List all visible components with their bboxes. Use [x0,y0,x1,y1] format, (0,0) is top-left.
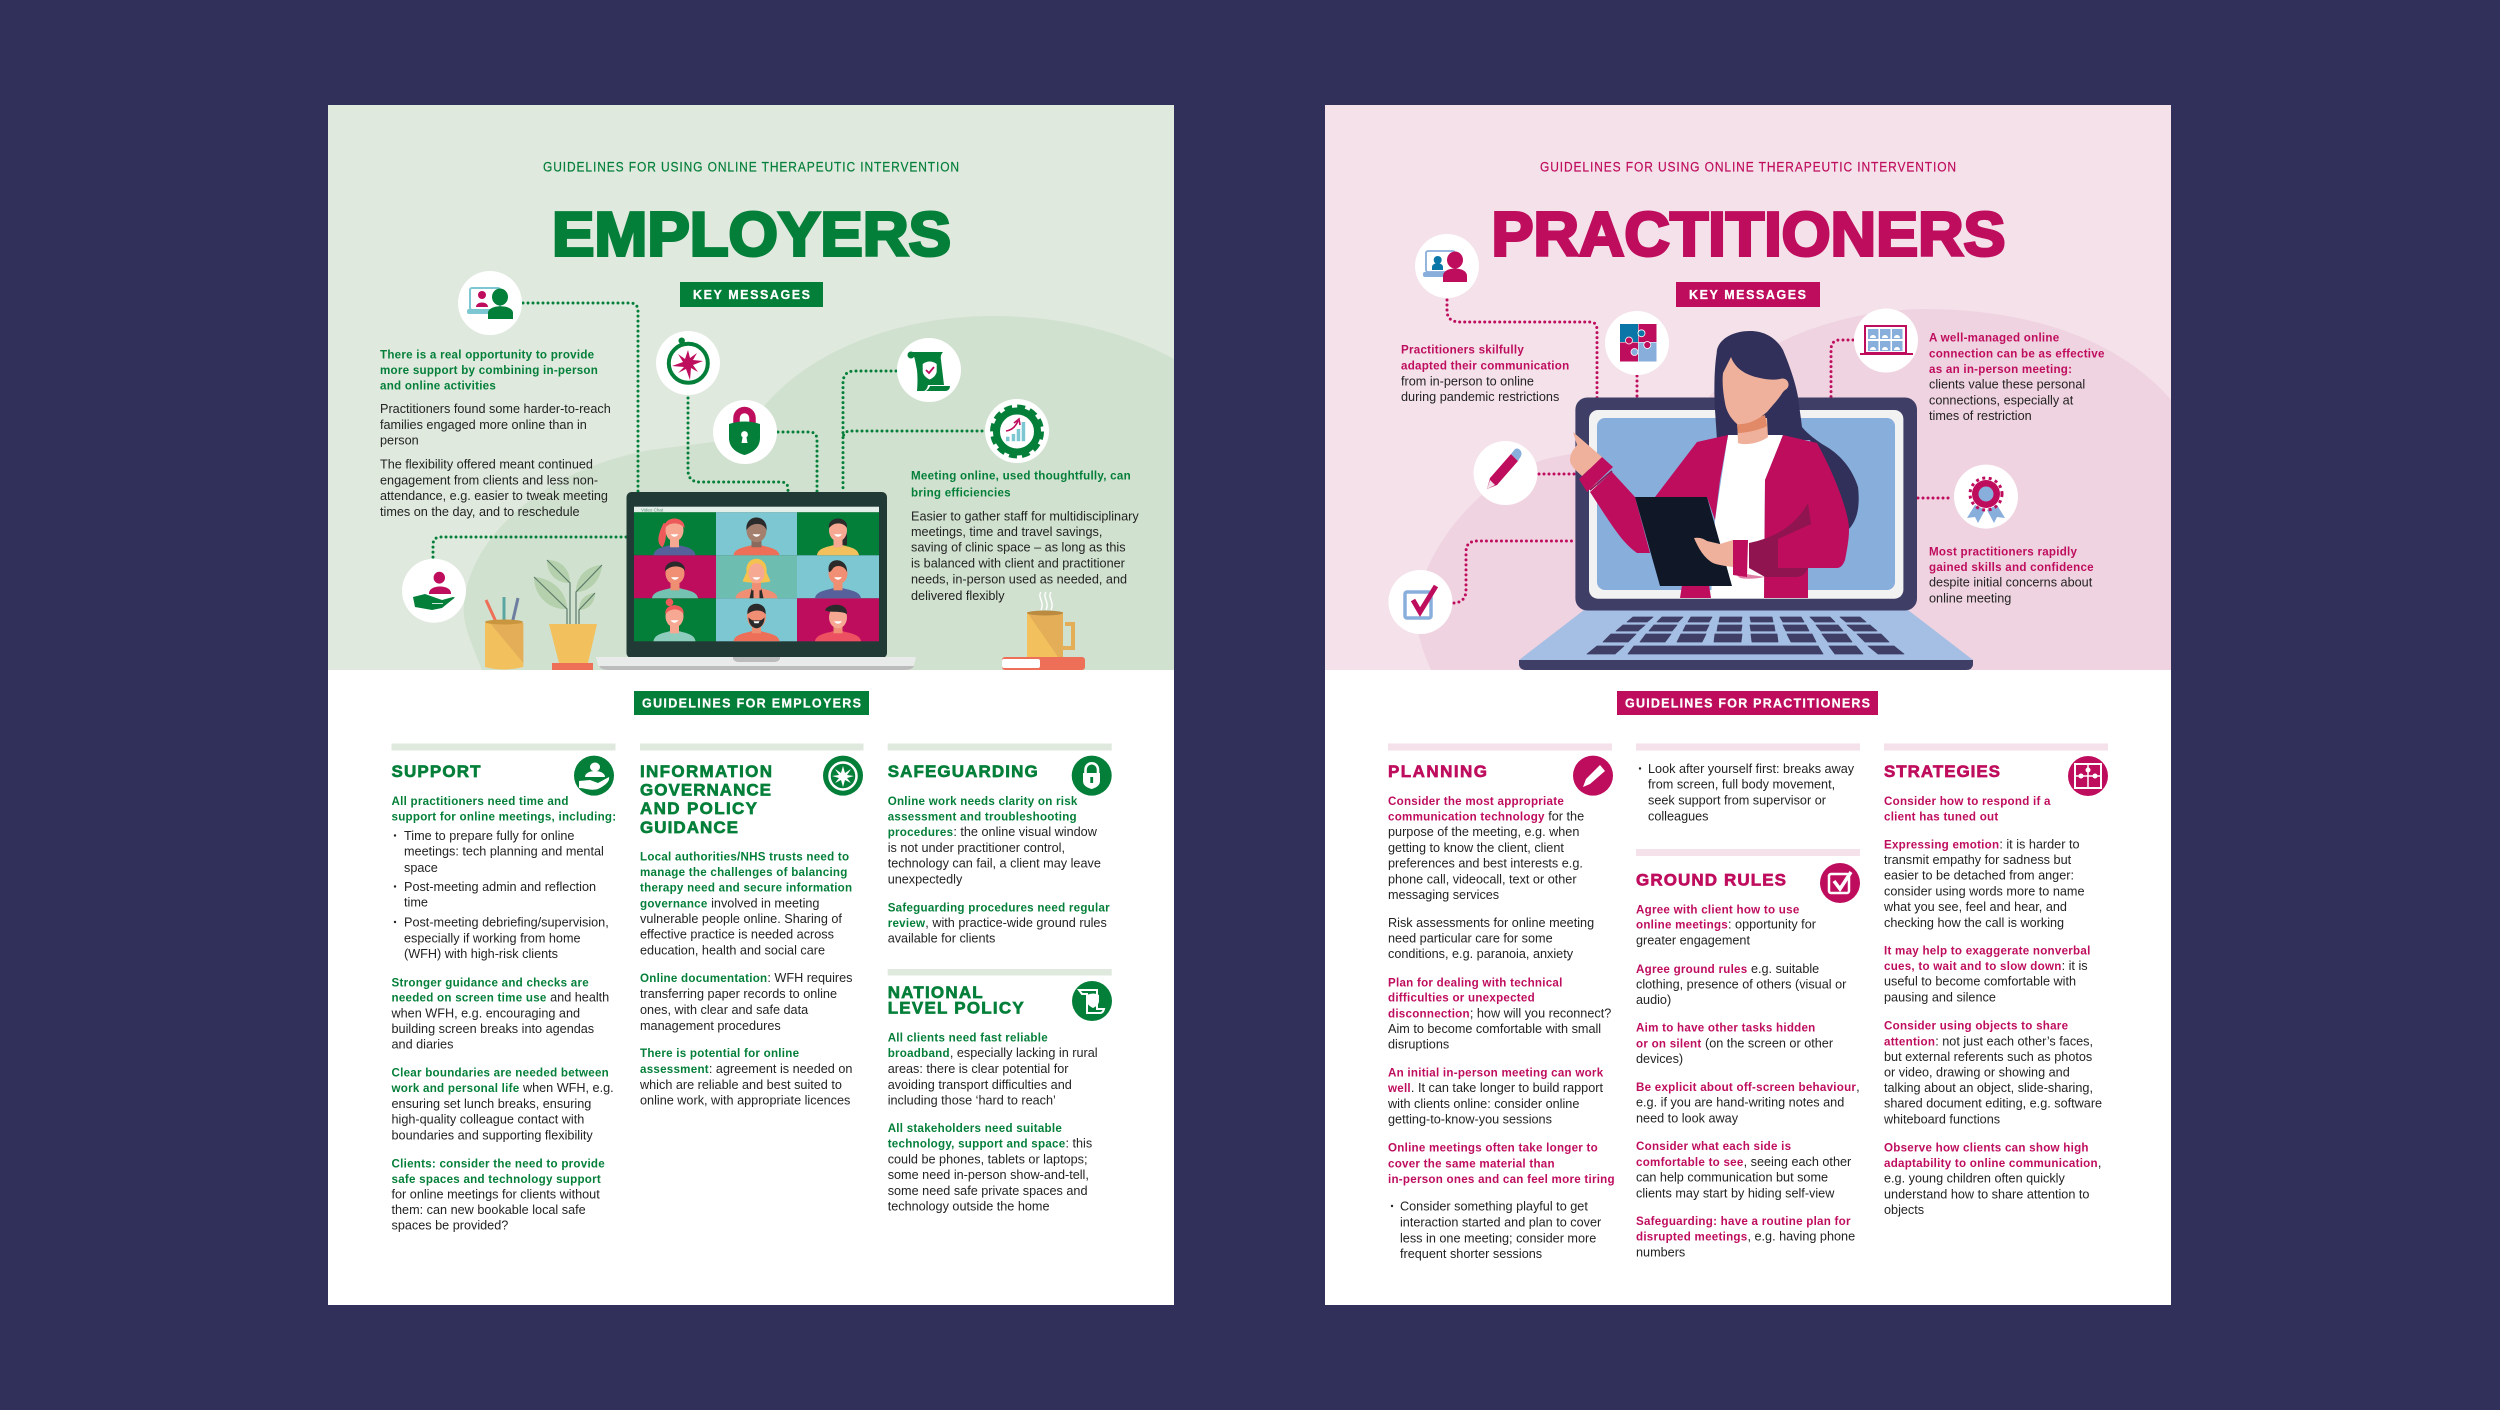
guidelines banner [1617,691,1878,715]
section: national level policy: LEVEL POLICY [888,998,1024,1018]
key message: efficiencies: Easier to gather staff for multidisciplinary [911,510,1139,524]
keys [1587,617,1904,654]
woman: cuff [1733,540,1748,577]
section: planning: An initial in-person meeting can work [1388,1066,1604,1079]
section: safeguarding: SAFEGUARDING [888,762,1038,781]
key messages label: KEY MESSAGES [693,288,810,302]
section: strategies: but external referents such as photos [1884,1050,2092,1064]
section: planning: Consider something playful to get [1400,1199,1588,1213]
section: information governance: INFORMATION [640,762,772,781]
section: strategies: Observe how clients can show high [1884,1141,2089,1154]
panel: practitioners [1325,105,2171,1305]
section: ground rules: or on silent (on the screen or other [1636,1036,1833,1050]
section: strategies: adaptability to online communication, [1884,1156,2101,1170]
icon: video call person [458,271,522,335]
title: PRACTITIONERS [1492,200,2006,270]
key message: well-managed connection [1929,332,2105,423]
section: planning: getting to know the client, client [1388,841,1564,855]
section: strategies: useful to become comfortable with [1884,975,2076,989]
illustration: mug and book [1002,592,1085,670]
section: information governance: GOVERNANCE [640,780,771,799]
key message: efficiencies: meetings, time and travel savings, [911,525,1102,539]
section: support: support for online meetings, including: [392,810,616,823]
key message: skills and confidence [1929,546,2094,606]
section: support: Time to prepare fully for online [404,829,574,843]
section: information governance: GUIDANCE [640,818,738,837]
section: safeguarding: Safeguarding procedures need regular [888,901,1110,914]
section: ground rules: GROUND RULES [1636,870,1786,890]
icon: checkbox [1388,570,1452,634]
section: strategies: what you see, feel and hear, and [1883,900,2067,914]
key message: adapted communication: during pandemic restrictions [1401,390,1559,404]
key message: skills and confidence: online meeting [1929,592,2011,606]
section: information governance: which are reliable and best suited to [639,1078,842,1092]
section: ground rules: greater engagement [1636,933,1750,947]
section: national level policy: avoiding transport difficulties and [888,1078,1072,1092]
section: support: needed on screen time use and health [392,990,609,1004]
key message: opportunity: and online activities [380,380,496,392]
icon: policy scroll [897,338,961,402]
section: ground rules: Agree with client how to use [1636,903,1800,916]
section: planning continued [1636,744,1860,823]
key message: well-managed connection: as an in-person meeting: [1929,363,2072,376]
section: national level policy: areas: there is clear potential for [888,1062,1068,1076]
section: safeguarding: procedures: the online visual window [888,825,1098,839]
section: planning continued: Look after yourself first: breaks away [1648,762,1855,776]
section: national level policy: All stakeholders need suitable [888,1122,1062,1135]
key message: well-managed connection: connections, especially at [1929,394,2074,408]
section: strategies: e.g. young children often quickly [1884,1172,2065,1186]
section: planning: phone call, videocall, text or other [1388,872,1577,886]
guidelines banner: GUIDELINES FOR EMPLOYERS [642,696,861,710]
section: support: time [404,896,428,910]
section: information governance: There is potential for online [640,1047,800,1060]
section: planning: cover the same material than [1388,1157,1555,1170]
icon: compass [823,756,863,796]
illustration: laptop and woman [1519,331,1973,670]
section: information governance: therapy need and secure information [640,882,852,895]
subtitle: GUIDELINES FOR USING ONLINE THERAPEUTIC INTERVENTION [1540,160,1957,174]
section: strategies: consider using words more to name [1884,884,2084,898]
icon: jigsaw [1605,311,1669,375]
section: support: especially if working from home [404,931,581,945]
icon: award rosette [1954,465,2018,529]
section: planning [1387,744,1615,1261]
section: safeguarding: available for clients [888,932,995,946]
section: planning: getting-to-know-you sessions [1388,1112,1552,1126]
key message: opportunity: more support by combining in-person [380,364,598,377]
woman: jacket lower left [1680,585,1711,598]
section: strategies: cues, to wait and to slow down: it is [1884,959,2088,973]
section: safeguarding: technology can fail, a client may leave [888,857,1101,871]
section: information governance [639,744,864,1107]
guidelines banner: GUIDELINES FOR PRACTITIONERS [1625,696,1870,710]
section: national level policy: including those ‘hard to reach’ [888,1093,1056,1107]
section: ground rules: numbers [1636,1245,1685,1259]
section: strategies: or video, drawing or showing and [1884,1066,2070,1080]
section: information governance: vulnerable people online. Sharing of [640,912,842,926]
section: planning: Consider the most appropriate [1388,795,1564,808]
section: national level policy: NATIONAL [888,983,983,1002]
woman: jacket left [1655,435,1728,520]
icon: pencil [1573,756,1613,796]
icon: efficiency gear [985,399,1049,463]
section: safeguarding [888,744,1112,946]
section: information governance: assessment: agreement is needed on [640,1062,852,1076]
section: ground rules: comfortable to see, seeing each other [1636,1155,1851,1169]
key message: adapted communication: from in-person to online [1401,374,1534,388]
key message: efficiencies: saving of clinic space – as long as this [911,540,1126,554]
section: support: Post-meeting debriefing/supervision, [404,916,609,930]
key message: skills and confidence: despite initial concerns about [1929,576,2093,590]
icon: pencil [1474,441,1538,505]
woman: jacket right [1764,435,1849,598]
icon: compass [656,331,720,395]
section: support: high-quality colleague contact with [392,1112,584,1126]
icon: scroll [1072,981,1112,1021]
section: safeguarding: assessment and troubleshooting [888,810,1077,823]
section: support: them: can new bookable local safe [392,1203,586,1217]
section: support: spaces be provided? [392,1219,508,1233]
section: planning: with clients online: consider online [1387,1097,1579,1111]
key message: opportunity [380,348,611,519]
section: ground rules: Agree ground rules e.g. suitable [1636,962,1819,976]
section: planning: communication technology for the [1388,809,1584,823]
section: planning: conditions, e.g. paranoia, anxiety [1388,947,1574,961]
icon: laptop gallery [1854,308,1918,372]
section: ground rules: Aim to have other tasks hidden [1636,1021,1816,1034]
section: strategies: understand how to share attention to [1884,1187,2089,1201]
background hills [464,316,1174,670]
icon: video call person [1415,234,1479,298]
section: support: when WFH, e.g. encouraging and [390,1006,580,1020]
section: information governance: manage the challenges of balancing [640,866,848,879]
section: information governance: Online documentation: WFH requires [640,971,852,985]
section: safeguarding: Online work needs clarity on risk [888,795,1078,808]
woman: sleeve shade [1749,503,1811,577]
section: support: boundaries and supporting flexibility [392,1128,593,1142]
key messages label: KEY MESSAGES [1689,288,1806,302]
section: strategies: transmit empathy for sadness but [1884,853,2072,867]
woman: neck [1737,418,1768,444]
section: ground rules: devices) [1636,1052,1683,1066]
section: planning: difficulties or unexpected [1388,991,1535,1004]
section: ground rules: disrupted meetings, e.g. having phone [1636,1230,1855,1244]
title: EMPLOYERS [552,200,951,270]
section: national level policy: technology outside the home [888,1199,1050,1213]
key message: adapted communication [1401,344,1569,404]
section: strategies: attention: not just each other’s faces, [1884,1034,2093,1048]
section: information governance: governance involved in meeting [640,897,819,911]
section: strategies: It may help to exaggerate nonverbal [1884,944,2091,957]
section: support: building screen breaks into agendas [392,1022,594,1036]
section: support [390,744,616,1233]
section: planning: frequent shorter sessions [1400,1247,1542,1261]
section: national level policy: some need safe private spaces and [888,1184,1088,1198]
icon: lock shield [713,400,777,464]
section: support: Clients: consider the need to provide [392,1157,605,1170]
guidelines banner [634,691,869,715]
key message: opportunity: engagement from clients and less non- [380,474,598,488]
section: safeguarding: is not under practitioner control, [888,841,1065,855]
key message: efficiencies: Meeting online, used thoughtfully, can [911,470,1131,482]
section: planning continued: colleagues [1648,809,1709,823]
section: strategies: easier to be detached from anger: [1884,869,2074,883]
woman: long hair [1714,331,1859,530]
section: support: SUPPORT [392,762,481,781]
section: planning: Online meetings often take longer to [1388,1141,1598,1154]
section: information governance: management procedures [640,1019,781,1033]
section: strategies: client has tuned out [1884,810,1999,823]
section: planning: in-person ones and can feel more tiring [1388,1173,1615,1186]
section: strategies: Expressing emotion: it is harder to [1884,837,2080,851]
key message: well-managed connection: clients value these personal [1929,378,2085,392]
icon: supporting hand [402,559,466,623]
section: national level policy: All clients need fast reliable [888,1031,1048,1044]
key message: skills and confidence: gained skills and confidence [1929,561,2094,574]
key message: well-managed connection: connection can be as effective [1929,348,2105,360]
key message: opportunity: person [380,434,419,448]
section: national level policy: some need in-person show-and-tell, [888,1168,1089,1182]
key message: opportunity: attendance, e.g. easier to tweak meeting [380,489,608,503]
woman: shirt [1711,435,1783,598]
section: information governance: online work, with appropriate licences [640,1093,850,1107]
section: ground rules: clothing, presence of others (visual or [1636,977,1846,991]
section: planning continued: seek support from supervisor or [1648,793,1826,807]
section: ground rules: Be explicit about off-screen behaviour, [1636,1080,1860,1094]
woman: raised arm [1590,472,1650,553]
section: planning continued: from screen, full body movement, [1648,778,1835,792]
section: strategies: STRATEGIES [1884,762,2000,781]
section: strategies [1883,744,2108,1217]
woman: pointing hand [1570,432,1602,476]
section: planning: less in one meeting; consider more [1400,1231,1596,1245]
section: planning: need particular care for some [1388,932,1553,946]
section: information governance: Local authorities/NHS trusts need to [640,850,849,863]
section: planning: disconnection; how will you reconnect? [1388,1006,1611,1020]
section: national level policy: could be phones, tablets or laptops; [888,1152,1088,1166]
key message: opportunity: times on the day, and to reschedule [380,505,580,519]
video call grid [634,512,879,641]
section: planning: disruptions [1388,1037,1449,1051]
section: strategies: whiteboard functions [1883,1112,2000,1126]
key message: adapted communication: adapted their communication [1401,360,1569,372]
key message: efficiencies: bring efficiencies [911,486,1011,500]
section: ground rules: online meetings: opportunity for [1636,918,1816,932]
woman: holding hand [1694,538,1733,567]
section: planning: purpose of the meeting, e.g. when [1388,825,1579,839]
section: ground rules: audio) [1636,993,1671,1007]
section: safeguarding: unexpectedly [888,872,963,886]
illustration: laptop with video call [596,492,916,670]
section: planning: Plan for dealing with technical [1388,976,1563,989]
section: planning: PLANNING [1388,762,1487,781]
section: information governance: education, health and social care [640,943,825,957]
section: support: ensuring set lunch breaks, ensuring [392,1097,591,1111]
key messages label [680,282,823,307]
section: support: work and personal life when WFH, e.g. [390,1081,614,1095]
section: planning: well. It can take longer to build rapport [1387,1081,1603,1095]
section: strategies: shared document editing, e.g. software [1884,1097,2102,1111]
section: planning: messaging services [1388,888,1499,902]
section: information governance: ones, with clear and safe data [640,1003,809,1017]
key message: opportunity: The flexibility offered meant continued [380,458,593,472]
key message: well-managed connection: times of restriction [1929,409,2032,423]
key message: efficiencies: is balanced with client and practitioner [911,556,1125,570]
key message: efficiencies [911,470,1139,603]
section: ground rules: clients may start by hiding self-view [1636,1186,1835,1200]
section: support: space [404,861,438,875]
laptop keyboard base [1519,610,1973,660]
section: support: All practitioners need time and [392,795,569,808]
dotted connectors [1447,300,1953,603]
section: strategies: checking how the call is working [1884,916,2064,930]
panel: employers [328,105,1174,1305]
section: strategies: objects [1884,1203,1924,1217]
section: planning: interaction started and plan to cover [1400,1215,1601,1229]
section: support: Stronger guidance and checks are [392,976,589,989]
section: national level policy: broadband, especially lacking in rural [888,1046,1098,1060]
section: national level policy [888,969,1112,1213]
section: support: safe spaces and technology support [392,1173,601,1186]
section: information governance: effective practice is needed across [640,928,834,942]
subtitle: GUIDELINES FOR USING ONLINE THERAPEUTIC INTERVENTION [543,160,960,174]
section: support: meetings: tech planning and mental [404,845,604,859]
section: strategies: Consider how to respond if a [1884,795,2051,808]
key message: skills and confidence: Most practitioners rapidly [1929,546,2078,558]
section: support: Clear boundaries are needed between [392,1066,609,1079]
background hills [1417,309,2171,670]
icon: padlock [1072,756,1112,796]
section: information governance: transferring paper records to online [640,987,837,1001]
section: support: (WFH) with high-risk clients [404,947,558,961]
section: strategies: pausing and silence [1884,991,1996,1005]
section: information governance: AND POLICY [640,799,758,818]
illustration: pencil cup [485,597,523,670]
key message: efficiencies: delivered flexibly [911,589,1005,603]
icon: jigsaw [2068,756,2108,796]
section: planning: preferences and best interests e.g. [1388,857,1583,871]
key message: opportunity: Practitioners found some harder-to-reach [380,402,611,416]
section: ground rules: need to look away [1636,1111,1739,1125]
key message: adapted communication: Practitioners skilfully [1401,344,1524,356]
section: safeguarding: review, with practice-wide ground rules [888,916,1107,930]
illustration: laptop with video call: Video Chat [641,507,664,512]
section: support: for online meetings for clients without [392,1187,600,1201]
key message: efficiencies: needs, in-person used as needed, and [911,572,1127,586]
icon: checkbox [1820,863,1860,903]
key message: opportunity: There is a real opportunity to provide [380,348,595,361]
section: ground rules: Consider what each side is [1636,1140,1791,1153]
section: strategies: talking about an object, slide-sharing, [1884,1081,2093,1095]
section: support: Post-meeting admin and reflection [404,880,596,894]
woman: tablet [1635,497,1732,586]
key message: well-managed connection: A well-managed online [1929,332,2060,344]
section: strategies: Consider using objects to share [1884,1020,2069,1033]
section: ground rules: Safeguarding: have a routine plan for [1636,1215,1851,1228]
key messages label [1676,282,1820,307]
woman: face [1723,357,1789,424]
section: ground rules: can help communication but some [1636,1171,1828,1185]
key message: opportunity: families engaged more online than in [380,418,587,432]
section: planning: Risk assessments for online meeting [1388,916,1594,930]
illustration: potted plant [534,560,602,670]
dotted connectors [433,303,982,559]
section: ground rules [1636,849,1860,1259]
section: national level policy: technology, support and space: this [888,1137,1092,1151]
section: support: and diaries [392,1037,453,1051]
section: planning: Aim to become comfortable with small [1388,1022,1601,1036]
section: ground rules: e.g. if you are hand-writing notes and [1636,1096,1844,1110]
icon: support [574,756,614,796]
